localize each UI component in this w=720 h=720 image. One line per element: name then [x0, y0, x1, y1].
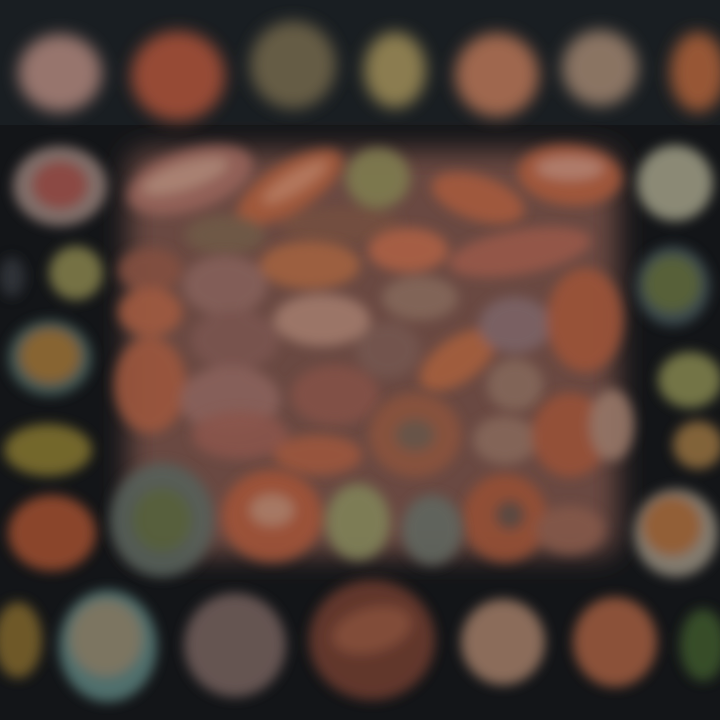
left column of dishes: [0, 146, 107, 571]
shrimp cluster: upper row: [119, 131, 624, 255]
top row of dishes: [18, 21, 720, 121]
panel: central seafood platter: [114, 131, 634, 562]
shrimp cluster: lower rows: [192, 389, 634, 562]
shrimp cluster: middle rows: [114, 218, 623, 434]
bottom row of dishes: [0, 580, 720, 702]
lower row of dishes inside tray: [110, 463, 462, 577]
platter base: [128, 150, 618, 555]
right column of dishes: [634, 145, 720, 577]
